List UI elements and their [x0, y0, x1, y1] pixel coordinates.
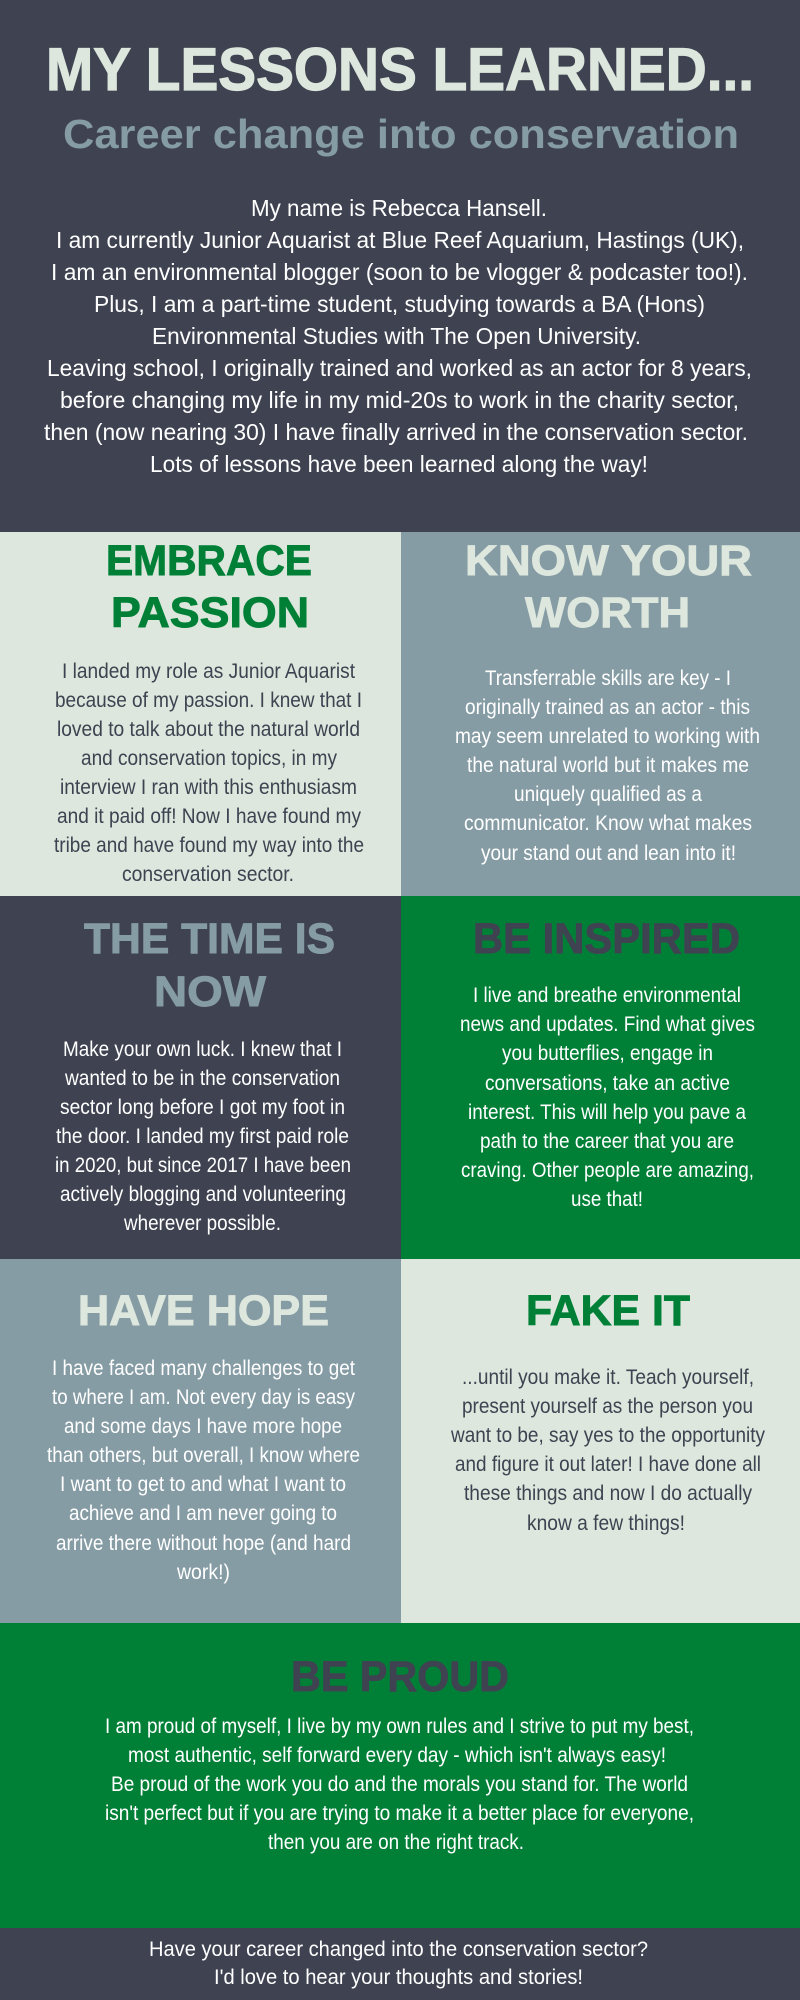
text block: be inspired: interest. This will help you pave a	[468, 1101, 746, 1124]
text block: have hope	[47, 1357, 360, 1584]
heading: have hope: HAVE HOPE	[78, 1287, 329, 1335]
text block: have hope: achieve and I am never going to	[69, 1502, 337, 1525]
heading: the time is now	[84, 915, 335, 1016]
text block: introduction: Lots of lessons have been learned along the way!	[150, 451, 648, 477]
text block: the time is now: wanted to be in the conservation	[64, 1067, 340, 1090]
panel: have hope	[0, 1259, 401, 1623]
text block: know your worth: may seem unrelated to working with	[455, 725, 760, 748]
text block: introduction: Leaving school, I originally trained and worked as an actor for 8 years,	[47, 355, 752, 381]
text block: embrace passion: loved to talk about the natural world	[57, 718, 360, 741]
text block: fake it: ...until you make it. Teach yourself,	[462, 1366, 754, 1389]
heading: the time is now: THE TIME IS	[84, 915, 335, 963]
text block: embrace passion: I landed my role as Junior Aquarist	[62, 660, 355, 683]
heading: embrace passion: EMBRACE	[106, 537, 312, 585]
panel: footer call to action	[0, 1928, 800, 2000]
text block: be proud	[105, 1715, 694, 1854]
text block: embrace passion: because of my passion. I knew that I	[55, 689, 362, 712]
text block: be inspired: conversations, take an active	[485, 1072, 730, 1095]
heading: be proud: BE PROUD	[291, 1653, 509, 1701]
text block: footer question: I'd love to hear your thoughts and stories!	[214, 1966, 583, 1989]
text block: embrace passion: and it paid off! Now I have found my	[57, 805, 361, 828]
text block: embrace passion: and conservation topics, in my	[81, 747, 337, 770]
text block: be inspired: craving. Other people are amazing,	[461, 1159, 754, 1182]
text block: know your worth: your stand out and lean into it!	[481, 842, 736, 865]
panel: be inspired	[401, 896, 800, 1259]
text block: the time is now: Make your own luck. I knew that I	[63, 1038, 342, 1061]
text block: be proud: I am proud of myself, I live by my own rules and I strive to put my best,	[105, 1715, 694, 1738]
text block: know your worth: communicator. Know what makes	[464, 812, 752, 835]
text block: embrace passion: interview I ran with this enthusiasm	[60, 776, 357, 799]
panel: be proud	[0, 1623, 800, 1928]
text block: be proud: isn't perfect but if you are trying to make it a better place for everyone,	[105, 1802, 694, 1825]
text block: introduction: Environmental Studies with The Open University.	[152, 323, 641, 349]
text block: the time is now: in 2020, but since 2017 I have been	[55, 1154, 351, 1177]
text block: the time is now	[55, 1038, 351, 1235]
text block: introduction	[44, 195, 752, 477]
text block: the time is now: wherever possible.	[123, 1212, 281, 1235]
text block: know your worth: originally trained as an actor - this	[465, 696, 750, 719]
subtitle: Career change into conservation	[63, 111, 739, 157]
heading: know your worth: WORTH	[525, 589, 690, 637]
panel: header introduction	[0, 0, 800, 532]
panel: know your worth	[401, 532, 800, 896]
text block: know your worth: uniquely qualified as a	[514, 783, 702, 806]
text block: be inspired: use that!	[571, 1188, 643, 1211]
text block: the time is now: the door. I landed my first paid role	[56, 1125, 349, 1148]
text block: introduction: I am an environmental blogger (soon to be vlogger & podcaster too!).	[51, 259, 748, 285]
text block: introduction: I am currently Junior Aquarist at Blue Reef Aquarium, Hastings (UK),	[56, 227, 744, 253]
text block: fake it	[450, 1366, 765, 1535]
heading: embrace passion	[106, 537, 312, 637]
panel: embrace passion	[0, 532, 401, 896]
text block: introduction: before changing my life in my mid-20s to work in the charity sector,	[60, 387, 739, 413]
panel: the time is now	[0, 896, 401, 1259]
heading: know your worth: KNOW YOUR	[465, 537, 752, 585]
text block: embrace passion	[54, 660, 364, 886]
text block: be proud: then you are on the right track.	[268, 1831, 524, 1854]
text block: embrace passion: tribe and have found my way into the	[54, 834, 364, 857]
text block: fake it: want to be, say yes to the opportunity	[450, 1424, 765, 1447]
text block: be proud: most authentic, self forward every day - which isn't always easy!	[128, 1744, 666, 1767]
text block: footer question: Have your career changed into the conservation sector?	[149, 1938, 648, 1961]
text block: have hope: I have faced many challenges to get	[52, 1357, 355, 1380]
text block: fake it: and figure it out later! I have done all	[455, 1453, 761, 1476]
text block: have hope: than others, but overall, I know where	[47, 1444, 360, 1467]
heading: fake it: FAKE IT	[526, 1287, 690, 1335]
text block: have hope: and some days I have more hope	[64, 1415, 342, 1438]
title: MY LESSONS LEARNED...	[46, 36, 754, 103]
text block: have hope: arrive there without hope (and hard	[56, 1532, 351, 1555]
text block: introduction: My name is Rebecca Hansell.	[251, 195, 547, 221]
text block: be inspired: I live and breathe environmental	[473, 984, 741, 1007]
panel: fake it	[401, 1259, 800, 1623]
text block: be inspired: news and updates. Find what gives	[460, 1013, 755, 1036]
text block: introduction: Plus, I am a part-time student, studying towards a BA (Hons)	[94, 291, 705, 317]
text block: have hope: work!)	[176, 1561, 230, 1584]
text block: fake it: present yourself as the person you	[462, 1395, 753, 1418]
text block: fake it: know a few things!	[527, 1512, 685, 1535]
text block: be proud: Be proud of the work you do and the morals you stand for. The world	[111, 1773, 688, 1796]
text block: know your worth: the natural world but it makes me	[467, 754, 749, 777]
text block: have hope: I want to get to and what I want to	[60, 1473, 346, 1496]
heading: embrace passion: PASSION	[111, 589, 309, 637]
text block: know your worth	[455, 667, 760, 865]
text block: introduction: then (now nearing 30) I have finally arrived in the conservation sector.	[44, 419, 748, 445]
text block: fake it: these things and now I do actually	[464, 1482, 752, 1505]
text block: be inspired	[460, 984, 755, 1211]
heading: the time is now: NOW	[154, 968, 266, 1016]
text block: be inspired: path to the career that you are	[480, 1130, 734, 1153]
text block: embrace passion: conservation sector.	[122, 863, 294, 886]
text block: the time is now: actively blogging and volunteering	[60, 1183, 346, 1206]
text block: the time is now: sector long before I got my foot in	[60, 1096, 345, 1119]
text block: be inspired: you butterflies, engage in	[502, 1042, 713, 1065]
text block: footer question	[149, 1938, 648, 1989]
text block: know your worth: Transferrable skills are key - I	[485, 667, 731, 690]
text block: have hope: to where I am. Not every day is easy	[52, 1386, 355, 1409]
heading: know your worth	[465, 537, 752, 637]
heading: be inspired: BE INSPIRED	[473, 915, 740, 963]
